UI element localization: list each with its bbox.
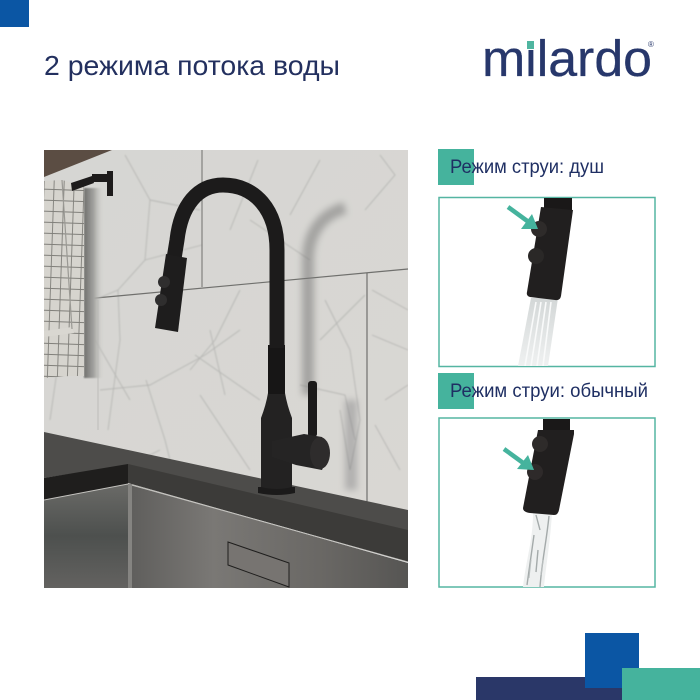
towel shadow: [84, 188, 104, 378]
handle: [292, 434, 323, 470]
logo: milardo: ®: [648, 40, 654, 49]
arrow: bottom button: [504, 449, 534, 470]
pull-out head: [155, 254, 187, 332]
sink left wall: [44, 484, 128, 588]
footer blocks: [476, 633, 700, 700]
counter front band right: [128, 464, 408, 562]
arrow: top button: [508, 207, 538, 229]
photo: black kitchen faucet over steel sink: [44, 150, 408, 588]
lever: [308, 381, 317, 437]
lever shadow: [345, 400, 357, 490]
towel rack: [71, 171, 113, 196]
logo: milardo: milardo: [482, 30, 652, 87]
countertop: [44, 432, 408, 535]
faucet shadow on wall: [308, 208, 345, 395]
marble wall: [44, 150, 408, 520]
spout neck: [268, 345, 285, 394]
faucet: [155, 185, 330, 495]
wooden shelf: [44, 150, 112, 177]
towel: [44, 180, 84, 378]
sink right wall: [130, 484, 408, 588]
spray head: [523, 418, 574, 515]
corner accent square: [0, 0, 29, 27]
label 2: Режим струи: обычный: [450, 381, 648, 402]
faucet body: [261, 393, 292, 489]
counter front band left: [44, 464, 128, 500]
gooseneck: [173, 185, 277, 348]
normal water stream: [523, 513, 552, 587]
title: 2 режима потока воды: [44, 50, 340, 81]
label square 1: [438, 149, 474, 185]
sink highlights: [44, 484, 408, 562]
spray head: [527, 197, 573, 300]
panel: shower mode: [439, 197, 655, 366]
tile joints: [85, 150, 408, 502]
shower water: [518, 298, 558, 366]
panel: normal mode: [439, 418, 655, 587]
faucet foot: [258, 487, 295, 495]
label 1: Режим струи: душ: [450, 157, 604, 178]
label square 2: [438, 373, 474, 409]
overflow plate: [228, 542, 289, 587]
